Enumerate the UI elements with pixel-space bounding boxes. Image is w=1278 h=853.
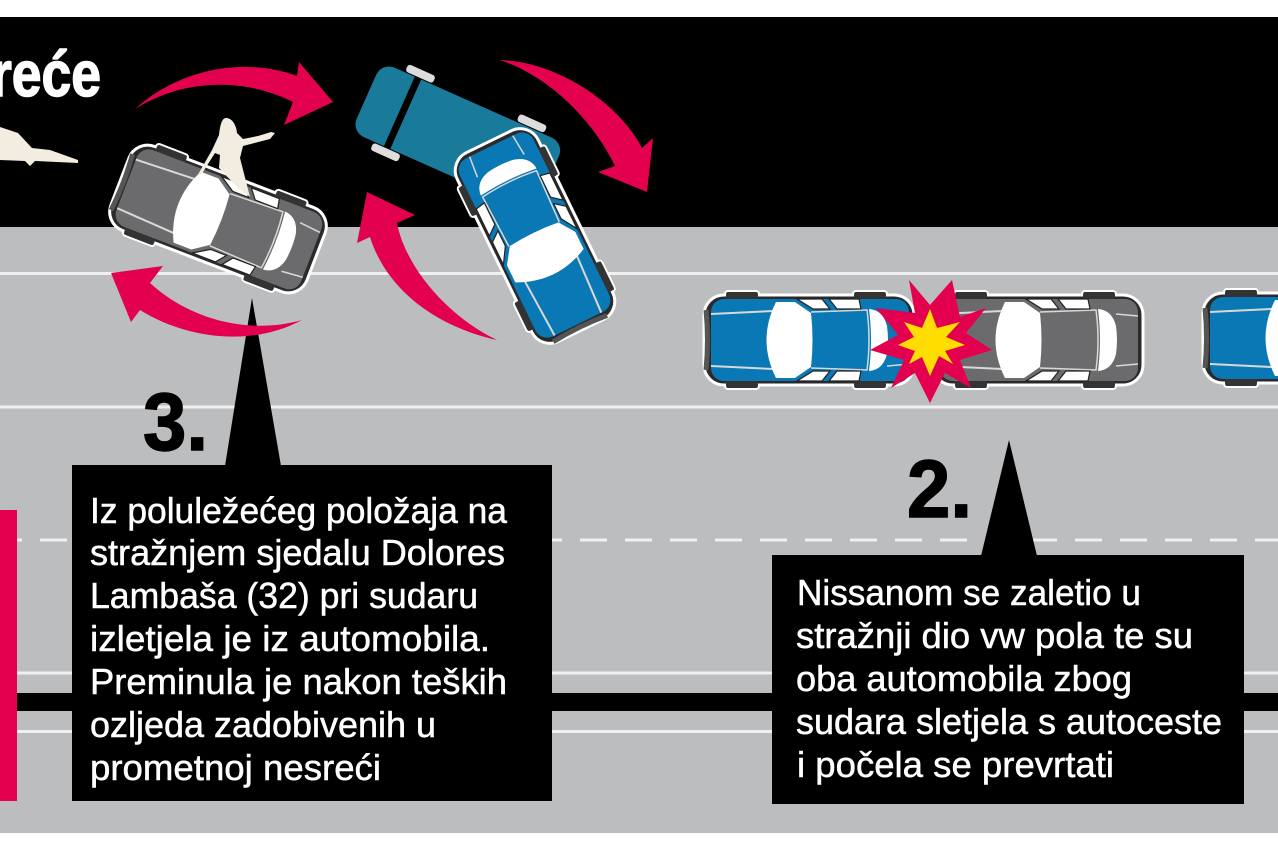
pointer: callout 2 [981,440,1037,556]
callout 3: stražnjem sjedalu Dolores [90,532,505,573]
callout 2: stražnji dio vw pola te su [796,615,1193,656]
callout 3: Preminula je nakon teških [90,661,507,702]
arrow: top right [500,60,653,192]
callout 2: sudara sletjela s autoceste [796,701,1222,742]
icon: blue car at right edge [1203,289,1278,387]
callout 3: ozljeda zadobivenih u [90,704,436,745]
callout 3: Iz poluležećeg položaja na [90,490,508,531]
callout 2: oba automobila zbog [796,658,1132,699]
pink side bar [0,510,17,801]
callout 3 [72,465,552,801]
icon: thrown figure fragment [0,127,78,166]
icon: grey car hit [933,291,1143,389]
callout 3: prometnoj nesreći [90,747,381,788]
icon: collision burst [870,280,992,403]
callout 2 [772,555,1244,804]
icon: grey car rotated [102,136,334,302]
step number 2: 2. [907,444,972,535]
callout 2: i počela se prevrtati [797,744,1114,785]
icon: woman ejected from car [196,118,275,197]
icon: blue car colliding [704,291,914,389]
callout 3: izletjela je iz automobila. [90,618,490,659]
pointer: callout 3 [225,298,281,466]
arrow: top left [135,62,333,125]
arrow: bottom left [111,266,302,337]
icon: rolling van [347,54,568,221]
arrow: middle [357,192,497,340]
callout 2: Nissanom se zaletio u [797,572,1141,613]
callout 3: Lambaša (32) pri sudaru [90,575,478,616]
step number 3: 3. [143,377,208,468]
icon: blue car rotated [445,120,625,352]
